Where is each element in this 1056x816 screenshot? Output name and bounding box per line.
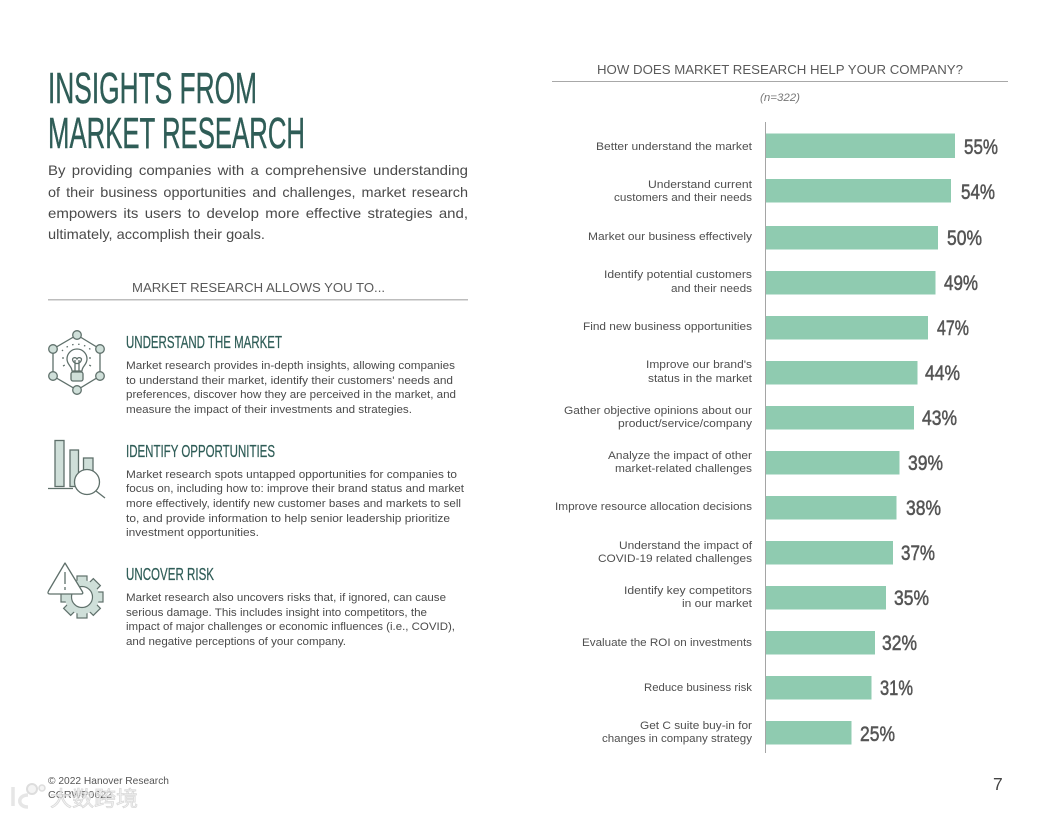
block: uncover risk <box>126 564 455 648</box>
bar: resource allocation: Improve resource allocation decisions <box>555 501 753 513</box>
block: identify opportunities: Market research spots untapped opportunities for companies to <box>126 469 457 481</box>
block: understand the market: measure the impact of their investments and strategies. <box>126 404 412 416</box>
bar: gather objective opinions: Gather objective opinions about our <box>564 405 752 417</box>
block: understand the market: to understand their market, identify their customers' needs and <box>126 375 453 387</box>
bar: c suite buy-in <box>602 720 895 746</box>
bar: resource allocation: 38% <box>906 496 941 520</box>
bar: roi: 32% <box>882 631 917 655</box>
block: uncover risk: serious damage. This includes insight into competitors, the <box>126 607 427 619</box>
intro paragraph <box>48 162 468 242</box>
bar: understand current customers: 54% <box>961 180 995 204</box>
chart heading: (n=322) <box>760 92 800 104</box>
block: understand the market: preferences, discover how they are perceived in the market, and <box>126 389 456 401</box>
intro paragraph: ultimately, accomplish their goals. <box>48 226 265 242</box>
bar: analyze impact: Analyze the impact of other <box>608 450 752 462</box>
block: understand the market <box>126 332 456 416</box>
bar: covid impact: COVID-19 related challenges <box>598 553 753 565</box>
bar chart <box>555 122 998 753</box>
block: uncover risk: Market research also uncovers risks that, if ignored, can cause <box>126 592 446 604</box>
block: identify opportunities: focus on, including how to: improve their brand status and market <box>126 483 464 495</box>
bar: identify potential customers: 49% <box>944 271 978 295</box>
intro paragraph: of their business opportunities and challenges, market research <box>48 184 468 200</box>
block: identify opportunities <box>126 441 464 539</box>
bar: key competitors: 35% <box>894 586 929 610</box>
bar: covid impact: 37% <box>901 541 935 565</box>
bar: improve brand status: 44% <box>925 361 960 385</box>
bar: find new business opportunities: 47% <box>937 316 969 340</box>
bar: roi: Evaluate the ROI on investments <box>582 637 753 649</box>
bar: business risk: 31% <box>880 676 913 700</box>
bar: c suite buy-in: Get C suite buy-in for <box>640 720 752 732</box>
icon: bar chart with magnifier <box>48 440 105 498</box>
bar: understand current customers: Understand current <box>648 179 752 191</box>
block: uncover risk: impact of major challenges or economic influences (i.e., COVID), <box>126 621 455 633</box>
bar: business risk: Reduce business risk <box>644 682 753 694</box>
block: identify opportunities: more effectively, identify new customer bases and markets to sell <box>126 498 461 510</box>
bar: identify potential customers: Identify potential customers <box>604 269 753 281</box>
bar: key competitors: in our market <box>682 598 752 610</box>
bar: c suite buy-in: changes in company strategy <box>602 733 753 745</box>
bar: understand current customers: customers and their needs <box>614 192 753 204</box>
chart heading <box>552 62 1008 104</box>
block: understand the market: UNDERSTAND THE MARKET <box>126 332 282 352</box>
bar: key competitors <box>624 585 929 610</box>
block: understand the market: Market research provides in-depth insights, allowing companies <box>126 360 456 372</box>
title: INSIGHTS FROM <box>48 64 257 113</box>
intro paragraph: By providing companies with a comprehensive understanding <box>48 162 468 178</box>
intro paragraph: empowers its users to develop more effective strategies and, <box>48 205 468 221</box>
bar: better understand the market <box>596 134 998 159</box>
block: uncover risk: UNCOVER RISK <box>126 564 214 584</box>
bar: analyze impact: market-related challenges <box>615 463 753 475</box>
footer credit: © 2022 Hanover Research <box>48 775 169 787</box>
title <box>48 64 305 158</box>
bar: understand current customers <box>614 179 995 204</box>
icon: light bulb network <box>49 331 104 394</box>
bar: better understand the market: Better understand the market <box>596 141 752 153</box>
block: identify opportunities: investment opportunities. <box>126 527 259 539</box>
block: identify opportunities: IDENTIFY OPPORTUNITIES <box>126 441 275 461</box>
bar: analyze impact: 39% <box>908 451 943 475</box>
bar: improve brand status <box>646 359 960 385</box>
watermark: 大数跨境 <box>50 788 138 811</box>
bar: improve brand status: status in the market <box>648 373 752 385</box>
bar: better understand the market: 55% <box>964 135 998 159</box>
section heading: market research allows you to: MARKET RESEARCH ALLOWS YOU TO... <box>132 280 385 295</box>
bar: covid impact: Understand the impact of <box>619 540 753 552</box>
bar: market our business: 50% <box>947 226 982 250</box>
bar: c suite buy-in: 25% <box>860 722 895 746</box>
bar: gather objective opinions: product/service/company <box>618 418 753 430</box>
icon: warning triangle and gear <box>48 563 103 618</box>
bar: market our business <box>588 226 982 250</box>
bar: improve brand status: Improve our brand's <box>646 359 753 371</box>
bar: key competitors: Identify key competitors <box>624 585 753 597</box>
chart heading: HOW DOES MARKET RESEARCH HELP YOUR COMPANY? <box>597 62 963 77</box>
bar: analyze impact <box>608 450 943 475</box>
bar: resource allocation <box>555 496 941 520</box>
watermark <box>13 784 138 811</box>
bar: find new business opportunities: Find new business opportunities <box>583 321 753 333</box>
page number: 7 <box>993 774 1003 794</box>
bar: covid impact <box>598 540 935 565</box>
bar: gather objective opinions <box>564 405 957 430</box>
title: MARKET RESEARCH <box>48 109 305 158</box>
block: identify opportunities: to, and provide information to help senior leadership prioritize <box>126 513 450 525</box>
bar: find new business opportunities <box>583 316 969 340</box>
bar: gather objective opinions: 43% <box>922 406 957 430</box>
footer credit: CGRWP0622 <box>48 789 112 801</box>
bar: identify potential customers <box>604 269 978 295</box>
bar: identify potential customers: and their needs <box>671 283 753 295</box>
bar: roi <box>582 631 917 655</box>
block: uncover risk: and negative perceptions of your company. <box>126 636 346 648</box>
bar: business risk <box>644 676 913 700</box>
footer credit <box>48 775 169 801</box>
bar: market our business: Market our business effectively <box>588 231 753 243</box>
